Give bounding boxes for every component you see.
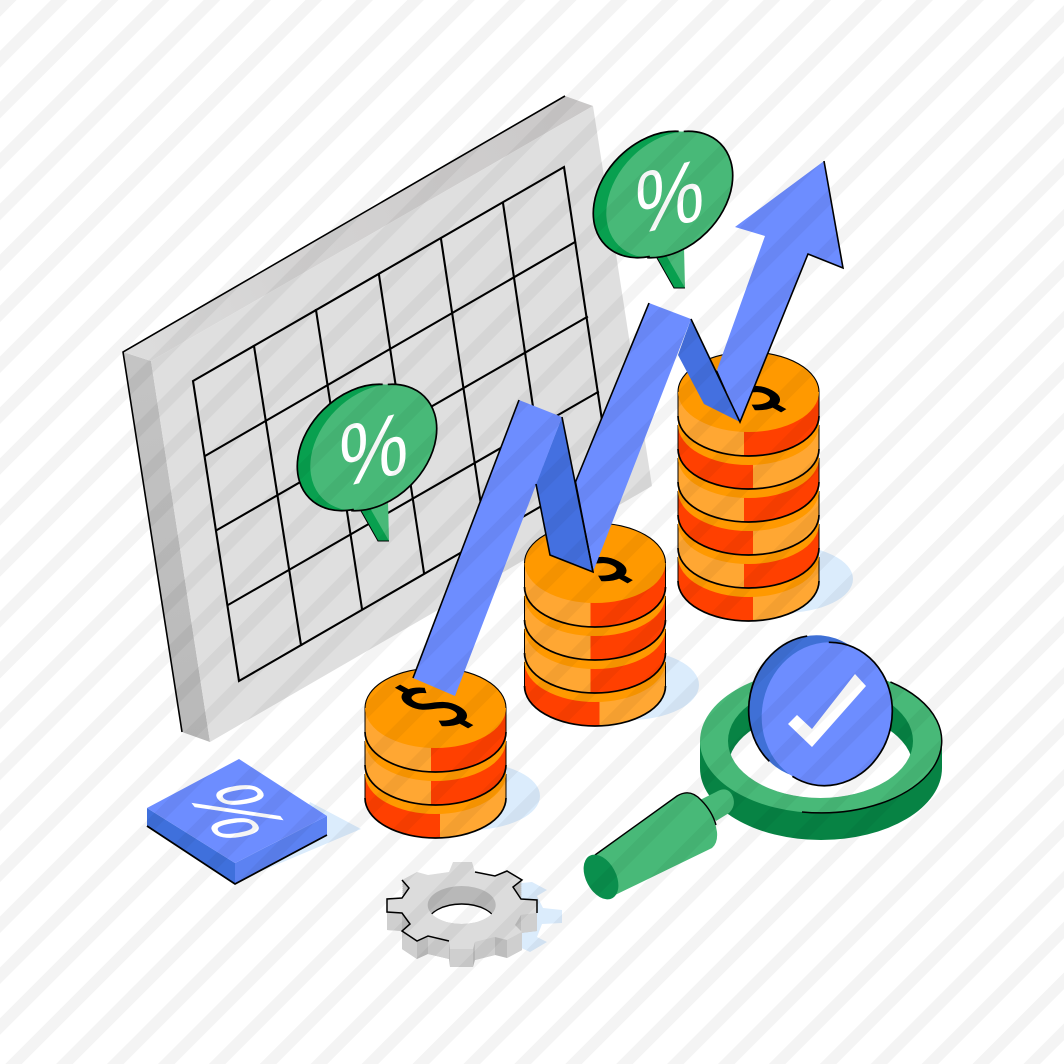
coin stack 1 (359, 665, 506, 838)
arrow segment 2 (576, 303, 691, 572)
tile left side (147, 808, 235, 884)
arrow segment 1 (413, 400, 562, 696)
ring outline (802, 682, 942, 813)
arrow fold 1 (536, 417, 593, 572)
panel: grid board (123, 96, 652, 742)
rising arrow (413, 161, 843, 696)
arrow head and shaft (717, 161, 843, 422)
dollar sign: $ (359, 665, 497, 742)
tile right side (235, 816, 327, 884)
bubble tail (657, 247, 685, 288)
arrow outlines (413, 161, 843, 678)
coin shadows (400, 545, 853, 830)
gear hole (428, 886, 496, 924)
percent tile (147, 759, 361, 884)
board outline (123, 96, 565, 732)
gear top face (387, 862, 537, 949)
bubble body (272, 359, 462, 536)
bubble tail (361, 500, 389, 541)
handle end cap (576, 849, 626, 905)
board top face (123, 96, 593, 361)
gear outline (387, 871, 537, 941)
handle neck (700, 789, 734, 821)
gear icon (387, 862, 562, 967)
ring inner wall (728, 684, 913, 798)
ring side (700, 741, 942, 840)
board grid (193, 167, 609, 681)
ring opening (730, 730, 910, 798)
arrow fold 2 (678, 319, 740, 422)
blue check disc (735, 623, 906, 798)
tile shadow (250, 802, 361, 876)
board side face (123, 352, 210, 742)
tile top face (147, 759, 327, 863)
coin stack 2 (519, 520, 666, 726)
speech bubble on board (272, 359, 462, 541)
ring top face (700, 669, 942, 813)
gear shadow (500, 880, 562, 952)
percent sign: % (635, 139, 704, 254)
dollar sign: $ (672, 349, 810, 426)
board front face (151, 106, 652, 742)
gear front faces (387, 912, 537, 967)
magnifying glass (576, 623, 942, 905)
speech bubble above arrow (568, 106, 758, 288)
percent sign: % (339, 392, 408, 507)
handle grip (595, 793, 717, 896)
coin stack 3 (672, 349, 819, 621)
bubble body (568, 106, 758, 283)
check mark (788, 674, 866, 747)
tile percent sign: % (162, 777, 314, 846)
gear extrusion (387, 864, 537, 967)
dollar sign: $ (519, 520, 657, 597)
